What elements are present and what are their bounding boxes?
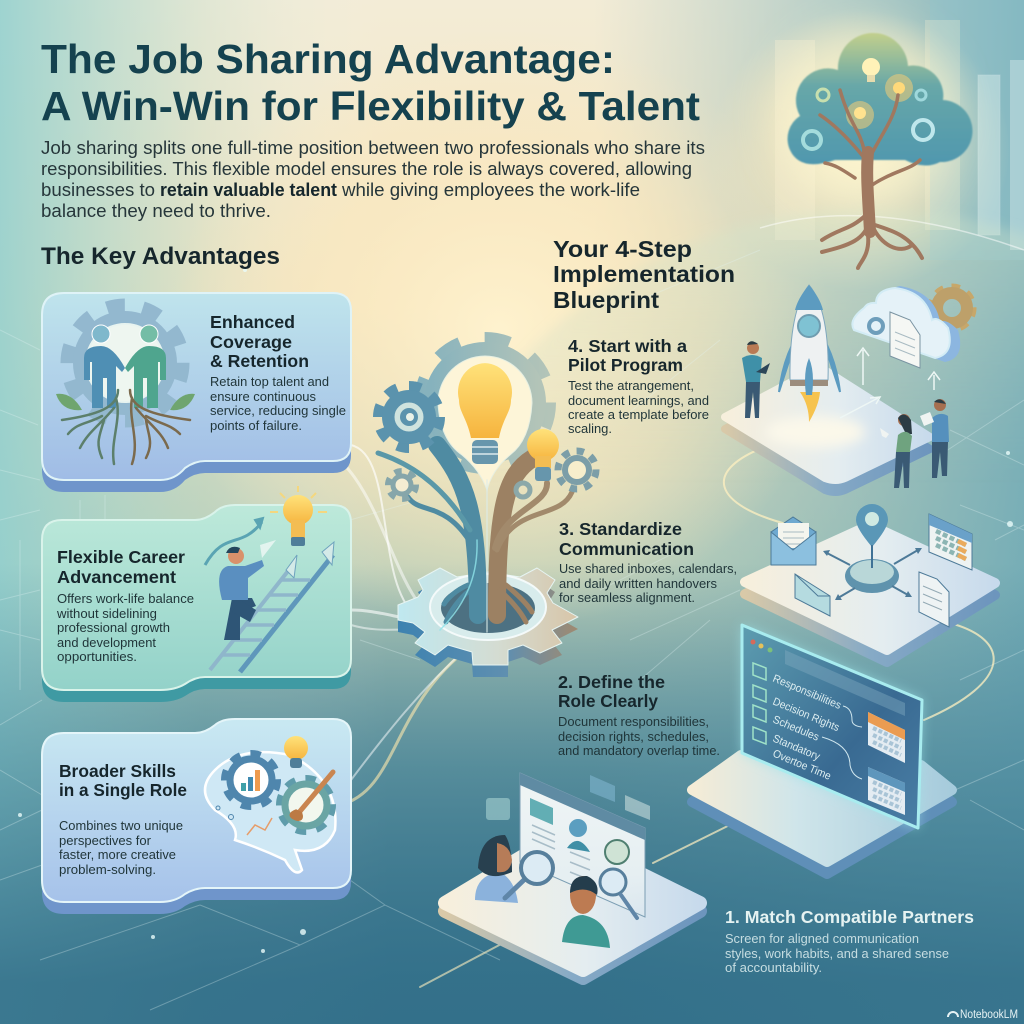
text: step 3: and daily written handovers <box>559 576 717 591</box>
text: card heading: & Retention <box>210 351 309 371</box>
text: card body: Offers work-life balance <box>57 591 194 606</box>
text: card body: professional growth <box>57 620 170 635</box>
icon: brain with gears, bulb and brush <box>205 736 335 872</box>
checklist labels: Responsibilities <box>771 673 843 712</box>
text: card body: without sidelining <box>56 606 157 621</box>
heading: implementation blueprint: Blueprint <box>553 287 659 313</box>
text: step 4 <box>568 336 709 436</box>
large bulb <box>458 363 512 464</box>
checklist labels: Standatory <box>771 733 822 763</box>
text: card heading: in a Single Role <box>59 780 187 800</box>
text: step 3: Use shared inboxes, calendars, <box>559 561 737 576</box>
title: The Job Sharing Advantage: <box>41 36 615 82</box>
text: card heading: Flexible Career <box>57 547 185 567</box>
text: step 4: Pilot Program <box>568 355 683 375</box>
hub and pin <box>845 504 899 593</box>
checklist labels: Schedules <box>771 714 821 744</box>
text: step 4: scaling. <box>568 421 612 436</box>
text: card body: Combines two unique <box>59 818 183 833</box>
trunk and roots <box>820 90 922 268</box>
checklist labels <box>771 673 843 783</box>
profile panel <box>520 773 645 917</box>
heading: key advantages: The Key Advantages <box>41 243 280 270</box>
intro text: while giving employees the work-life <box>341 179 640 200</box>
text: step 4: create a template before <box>568 407 709 422</box>
person with clipboard <box>742 341 770 418</box>
illustration: top-right tree <box>775 25 973 268</box>
icon: two people in gear with roots <box>56 305 195 464</box>
text: step 3: 3. Standardize <box>559 519 682 539</box>
base gear <box>398 568 578 677</box>
intro text: Job sharing splits one full-time position between two professionals who share its <box>41 137 705 158</box>
text: step 3: for seamless alignment. <box>559 590 695 605</box>
small gears <box>388 451 596 499</box>
left gear <box>378 386 440 448</box>
heading: implementation blueprint: Your 4-Step <box>553 236 692 262</box>
arrows <box>823 548 922 600</box>
platform <box>725 367 930 492</box>
step 2 platform: role definition screen <box>692 625 952 874</box>
icon: envelope closed <box>795 574 830 616</box>
icon: calendar <box>929 514 972 570</box>
platform <box>745 525 995 662</box>
text: step 2 <box>558 672 720 758</box>
text: step 2: Role Clearly <box>558 691 658 711</box>
floating chips <box>486 775 650 820</box>
text: card heading: Advancement <box>57 567 176 587</box>
two people with tablets <box>880 399 949 488</box>
man with magnifier <box>562 869 637 948</box>
text: card body <box>210 374 346 433</box>
panel: broader skills <box>42 719 351 914</box>
intro text: responsibilities. This flexible model ensures the role is always covered, allowing <box>41 158 692 179</box>
text: card body: Retain top talent and <box>210 374 329 389</box>
text: card body: perspectives for <box>59 833 152 848</box>
text: card body: and development <box>57 635 156 650</box>
screen <box>742 625 922 828</box>
checklist labels: Decision Rights <box>771 696 841 734</box>
intro text: balance they need to thrive. <box>41 200 271 221</box>
small bulb <box>527 429 559 481</box>
large gear <box>421 339 549 490</box>
text: card body <box>56 591 194 664</box>
text: card heading: Coverage <box>210 332 292 352</box>
text: card body: opportunities. <box>57 649 137 664</box>
tree crown <box>788 33 973 166</box>
text: step 3 <box>559 519 737 605</box>
title: A Win-Win for Flexibility & Talent <box>41 83 700 129</box>
text: step 1: styles, work habits, and a shared sense <box>725 946 949 961</box>
intro text: businesses to <box>41 179 155 200</box>
heading: implementation blueprint <box>553 236 735 313</box>
checklist labels: Overtoe Time <box>771 748 833 783</box>
text: step 2: decision rights, schedules, <box>558 729 709 744</box>
text: step 1: Screen for aligned communication <box>725 931 919 946</box>
intro text: retain valuable talent <box>160 179 337 200</box>
central illustration: tree of gears and bulbs <box>378 339 596 677</box>
text: step 1: of accountability. <box>725 960 822 975</box>
step 1 platform: matching partners <box>445 773 700 978</box>
calendars <box>868 712 905 815</box>
notebooklm mark: NotebookLM <box>960 1009 1018 1021</box>
text: card body: service, reducing single <box>210 403 346 418</box>
text: card heading <box>210 312 309 371</box>
text: card body: points of failure. <box>210 418 302 433</box>
icon: man climbing ladder to bulb <box>205 518 334 672</box>
platform <box>445 834 700 978</box>
icon: ladder <box>210 542 334 672</box>
text: card heading <box>59 761 187 800</box>
heading: implementation blueprint: Implementation <box>553 261 735 287</box>
panel: enhanced coverage and retention <box>42 293 351 492</box>
text: card body: problem-solving. <box>59 862 156 877</box>
rocket <box>779 285 840 422</box>
text: card body <box>59 818 183 877</box>
text: card heading: Enhanced <box>210 312 295 332</box>
text: card heading <box>57 547 185 587</box>
text: step 1: 1. Match Compatible Partners <box>725 907 974 927</box>
tree trunk and branches <box>378 445 572 632</box>
text: step 4: Test the atrangement, <box>568 378 694 393</box>
woman with magnifier <box>475 835 553 903</box>
arrows up <box>840 348 940 418</box>
step 4 platform: rocket launch <box>725 285 972 492</box>
text: step 4: document learnings, and <box>568 393 709 408</box>
text: card body: faster, more creative <box>59 847 176 862</box>
icon: light bulb <box>270 486 327 546</box>
crown icons <box>803 58 933 149</box>
step 3 platform: communication hub <box>745 504 995 662</box>
text: step 4: 4. Start with a <box>568 336 687 356</box>
title <box>41 36 700 129</box>
flowing light lines <box>300 440 994 987</box>
text: step 2: Document responsibilities, <box>558 714 709 729</box>
text: step 2: and mandatory overlap time. <box>558 743 720 758</box>
cloud with document and gear <box>852 286 972 368</box>
panel: flexible career advancement <box>42 486 351 702</box>
intro text <box>41 137 705 221</box>
icon: document <box>919 572 949 627</box>
text: step 1 <box>725 907 974 975</box>
icon: envelope open <box>771 517 816 565</box>
text: step 3: Communication <box>559 539 694 559</box>
text: step 2: 2. Define the <box>558 672 665 692</box>
platform <box>692 755 952 874</box>
text: card body: ensure continuous <box>210 389 316 404</box>
text: card heading: Broader Skills <box>59 761 176 781</box>
